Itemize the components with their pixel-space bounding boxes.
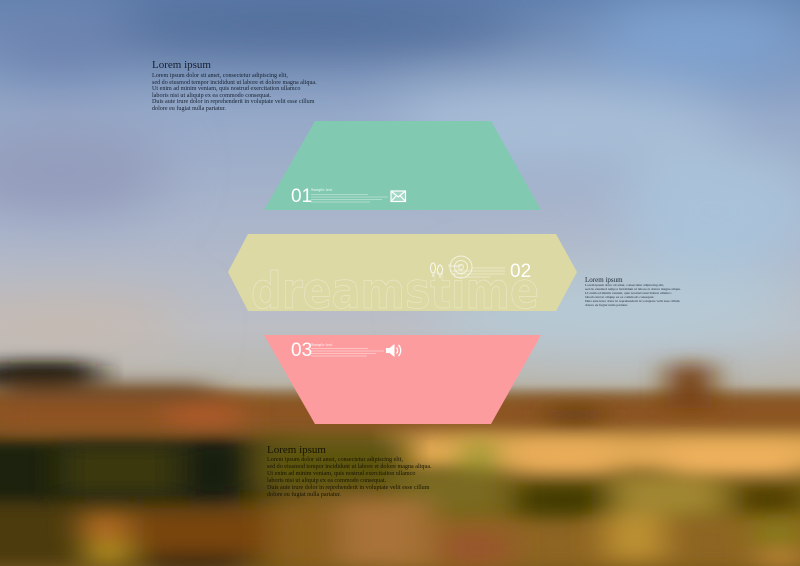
text block: bottom: Ut enim ad minim veniam, quis nostrud exercitation ullamco [267,471,415,477]
text block: bottom: Lorem ipsum [267,444,326,456]
text block: right: sed do eiusmod tempor incididunt ut labore et dolore magna aliqua. [585,287,681,291]
text block: bottom: laboris nisi ut aliquip ex ea commodo consequat. [267,478,386,484]
segment 03: pink trapezoid [264,335,541,424]
text block: bottom: dolore eu fugiat nulla pariatur. [267,492,341,498]
number 01: 01 [291,186,312,207]
text block: right: dolore eu fugiat nulla pariatur. [585,303,628,307]
text block: right: Lorem ipsum [585,276,623,284]
text block: top left: Ut enim ad minim veniam, quis nostrud exercitation ullamco [152,86,300,92]
number 02: 02 [510,261,531,282]
text block: top left: dolore eu fugiat nulla pariatur. [152,106,226,112]
text block: right: Lorem ipsum dolor sit amet, consectetur adipiscing elit, [585,283,664,287]
text block: top left [152,59,317,112]
text block: bottom: Lorem ipsum dolor sit amet, consectetur adipiscing elit, [267,457,403,463]
text block: top left: laboris nisi ut aliquip ex ea commodo consequat. [152,93,271,99]
icon: speaker [386,344,401,357]
segment 03 caption [311,342,384,356]
text block: right: Ut enim ad minim veniam, quis nostrud exercitation ullamco [585,291,671,295]
watermark: dreamstime [251,262,539,320]
icon: spiral [450,256,472,278]
icon: envelope [391,191,406,202]
text block: right: laboris nisi ut aliquip ex ea commodo consequat. [585,295,654,299]
number 03: 03 [291,340,312,361]
text block: bottom [267,444,432,498]
segment 02 caption: Sample [448,263,462,268]
text block: bottom: Duis aute irure dolor in reprehenderit in voluptate velit esse cillum [267,485,429,491]
segment 01: green trapezoid [264,121,541,210]
segment 02: yellow arrow band [228,234,577,320]
text block: top left: Duis aute irure dolor in reprehenderit in voluptate velit esse cillum [152,99,314,105]
text block: right: Duis aute irure dolor in reprehenderit in voluptate velit esse cillum [585,299,680,303]
segment 01 caption [311,187,388,202]
text block: top left: Lorem ipsum [152,59,211,71]
text block: bottom: sed do eiusmod tempor incididunt ut labore et dolore magna aliqua. [267,464,432,470]
text block: top left: Lorem ipsum dolor sit amet, consectetur adipiscing elit, [152,73,288,79]
segment 02 caption [448,263,505,277]
segment 03 caption: Sample text [311,342,333,347]
icon: footprints [430,263,442,278]
text block: top left: sed do eiusmod tempor incididunt ut labore et dolore magna aliqua. [152,80,317,86]
segment 01 caption: Sample text [311,187,333,192]
text block: right [585,276,681,307]
